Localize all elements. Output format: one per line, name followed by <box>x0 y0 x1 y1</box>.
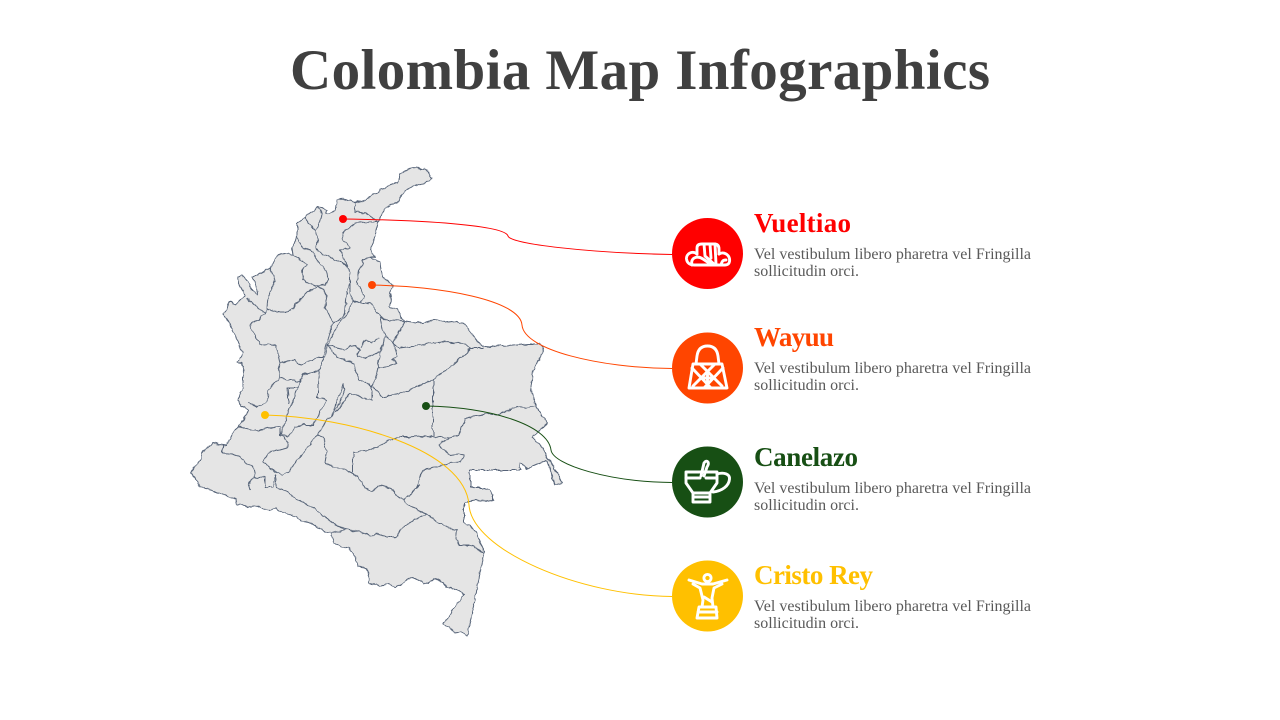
text block: Canelazo <box>754 442 1031 514</box>
text block: Canelazo: Canelazo <box>754 442 858 472</box>
text block: Canelazo: sollicitudin orci. <box>754 497 859 514</box>
Santander and Boyaca <box>328 300 385 358</box>
map dot: Wayuu <box>368 281 376 289</box>
text block: Wayuu <box>754 322 1031 394</box>
icon: wayuu bag <box>672 332 743 404</box>
connector: Cristo Rey <box>265 415 672 596</box>
text block: Vueltiao <box>754 208 1031 280</box>
icon: canelazo cup <box>672 446 743 518</box>
map of Colombia <box>190 167 562 636</box>
title: Colombia Map Infographics <box>290 39 990 102</box>
text block: Canelazo: Vel vestibulum libero pharetra vel Fringilla <box>754 480 1031 497</box>
text block: Cristo Rey: Vel vestibulum libero pharetra vel Fringilla <box>754 598 1031 615</box>
map dot: Cristo Rey <box>261 411 269 419</box>
text block: Cristo Rey <box>754 560 1031 632</box>
Cordoba and Antioquia <box>267 255 318 312</box>
text block: Cristo Rey: sollicitudin orci. <box>754 615 859 632</box>
text block: Wayuu: Wayuu <box>754 322 834 352</box>
map dot: Canelazo <box>422 402 430 410</box>
connector: Vueltiao <box>343 219 672 254</box>
icon: cristo rey statue <box>672 560 743 632</box>
icon: vueltiao hat <box>672 218 743 289</box>
text block: Vueltiao: sollicitudin orci. <box>754 263 859 280</box>
text block: Wayuu: sollicitudin orci. <box>754 377 859 394</box>
Nariño and Putumayo <box>223 445 255 490</box>
Llanos and Amazon departments <box>373 348 470 397</box>
text block: Cristo Rey: Cristo Rey <box>754 560 874 590</box>
text block: Vueltiao: Vueltiao <box>754 208 851 238</box>
Caribbean departments <box>305 207 322 230</box>
text block: Vueltiao: Vel vestibulum libero pharetra vel Fringilla <box>754 246 1031 263</box>
map dot: Vueltiao <box>339 215 347 223</box>
connector: Canelazo <box>426 406 672 482</box>
connector: Wayuu <box>372 285 672 368</box>
text block: Wayuu: Vel vestibulum libero pharetra vel Fringilla <box>754 360 1031 377</box>
